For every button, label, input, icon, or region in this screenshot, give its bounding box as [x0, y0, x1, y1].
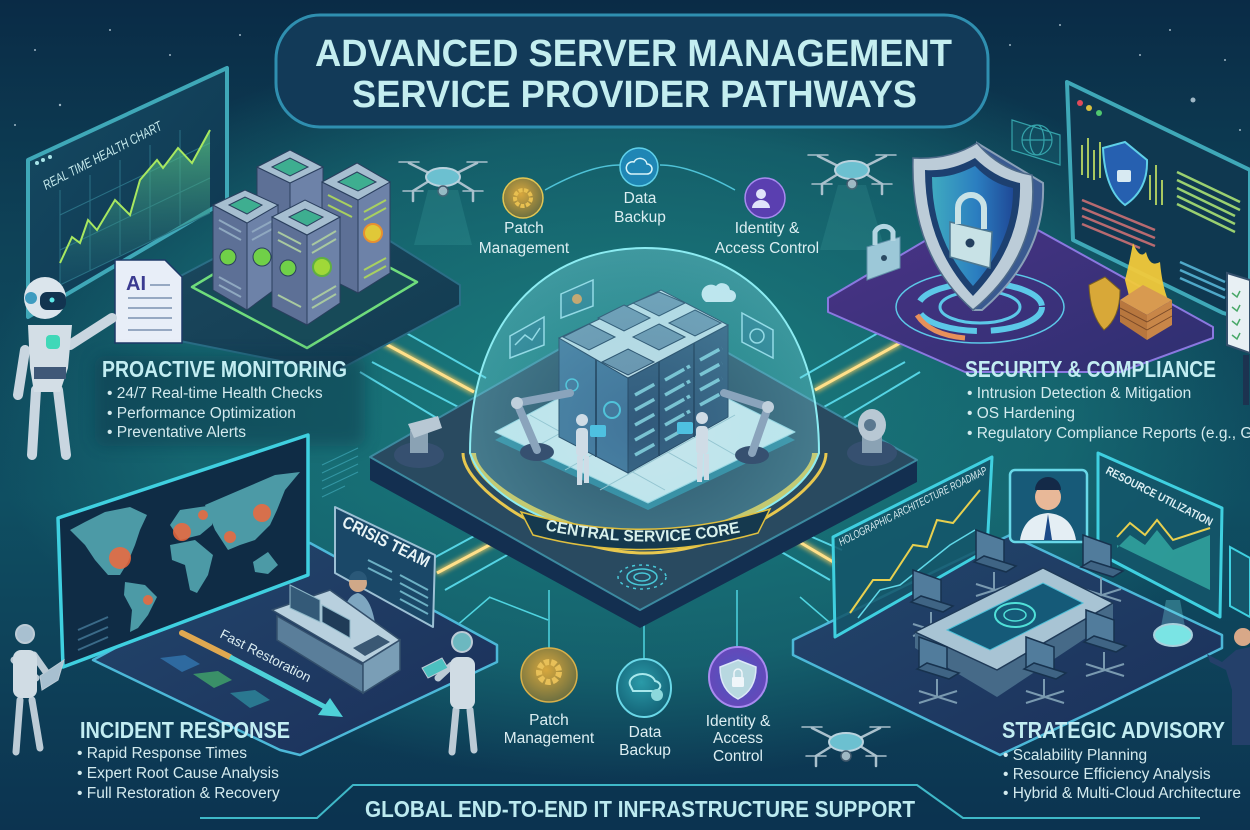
icon: drone: [399, 162, 487, 245]
expert tile: [1010, 470, 1087, 542]
label: patch management: Management: [479, 240, 570, 257]
bullets: • Hybrid & Multi-Cloud Architecture: [1003, 785, 1241, 802]
map text: [322, 448, 358, 497]
platform: [793, 535, 1222, 755]
icon: data backup: [617, 659, 671, 717]
bullets: • Performance Optimization: [107, 405, 296, 422]
bullets: • Full Restoration & Recovery: [77, 785, 280, 802]
label: data backup: Backup: [619, 742, 671, 759]
restoration arrow: Fast Restoration: [218, 626, 314, 685]
bullets: [77, 745, 280, 802]
panel: strategic advisory: [793, 453, 1250, 802]
label: patch management: Management: [504, 730, 595, 747]
robot left: [13, 625, 64, 752]
heading: INCIDENT RESPONSE: [80, 717, 290, 743]
tiled floor: [495, 355, 795, 510]
platform: [93, 543, 497, 755]
footer banner: GLOBAL END-TO-END IT INFRASTRUCTURE SUPPORT: [365, 796, 915, 822]
subtitle text: SERVICE PROVIDER PATHWAYS: [352, 74, 917, 116]
floating panels: [510, 280, 773, 358]
footer banner: [200, 785, 1200, 830]
bullets: • Expert Root Cause Analysis: [77, 765, 279, 782]
platform: [828, 203, 1213, 372]
chart screen: [28, 68, 227, 317]
bullets: • OS Hardening: [967, 405, 1075, 422]
icon: identity: [745, 178, 785, 218]
dome: [470, 248, 819, 540]
utilization screen: [1098, 453, 1222, 617]
label: identity: Identity &: [706, 713, 771, 730]
label: patch management: Patch: [529, 712, 569, 729]
title text: ADVANCED SERVER MANAGEMENT: [315, 33, 952, 75]
restoration arrow: [160, 626, 343, 717]
robot right: [422, 632, 475, 752]
roadmap screen: HOLOGRAPHIC ARCHITECTURE ROADMAP: [837, 465, 990, 549]
panel: proactive monitoring: [18, 68, 487, 455]
bullets: [1003, 747, 1241, 802]
label: identity: Control: [713, 748, 763, 765]
technician right: [677, 412, 709, 482]
connector lines: [360, 165, 920, 660]
core label: CENTRAL SERVICE CORE: [546, 520, 740, 542]
chart screen: REAL TIME HEALTH CHART: [40, 118, 166, 193]
heading: PROACTIVE MONITORING: [102, 356, 347, 382]
side panel: [1230, 547, 1250, 617]
checklist: [1227, 273, 1250, 405]
heading backdrop: [95, 356, 365, 446]
robot arm right: [724, 393, 774, 464]
bullets: • Rapid Response Times: [77, 745, 247, 762]
golden ring: [463, 453, 826, 553]
panel: incident response: [13, 435, 497, 802]
chairs: [911, 530, 1123, 636]
label: data backup: Data: [624, 190, 657, 207]
icon: globe hologram: [1012, 120, 1060, 165]
bullets: [967, 385, 1250, 442]
hologram pad: [1154, 600, 1192, 646]
table: [915, 568, 1113, 697]
rings: [896, 271, 1064, 343]
person and desk: [272, 571, 400, 693]
bullets: • Preventative Alerts: [107, 424, 246, 441]
label: identity: Access: [713, 730, 763, 747]
bottom service icons: [504, 647, 771, 765]
icon: core target: [618, 565, 666, 589]
title banner: [276, 15, 988, 127]
icon: drone bottom: [802, 727, 890, 766]
bullets: [107, 385, 323, 441]
icon: data backup: [620, 148, 658, 186]
technician left: [576, 414, 606, 485]
right screen: [1067, 82, 1250, 320]
bullets: • 24/7 Real-time Health Checks: [107, 385, 323, 402]
roadmap screen: [833, 457, 992, 637]
icon: firewall: [1089, 243, 1172, 340]
panel: security and compliance: [808, 82, 1250, 442]
bullets: • Scalability Planning: [1003, 747, 1147, 764]
robot: [18, 277, 112, 455]
robot arm left: [511, 393, 570, 461]
label: patch management: Patch: [504, 220, 544, 237]
label: identity: Access Control: [715, 240, 819, 257]
front chairs: [917, 610, 1126, 703]
green zone: [192, 221, 417, 348]
label: identity: Identity &: [735, 220, 800, 237]
icon: shield: [913, 143, 1043, 310]
crisis team screen: [335, 507, 435, 627]
bullets: • Intrusion Detection & Mitigation: [967, 385, 1191, 402]
top service icons: [479, 148, 819, 257]
icon: identity: [709, 647, 767, 707]
camera right: [847, 409, 897, 466]
platform: [150, 200, 460, 372]
label: data backup: Backup: [614, 209, 666, 226]
base platform: [370, 457, 917, 628]
icon: padlock: [867, 226, 900, 280]
person: [1207, 628, 1250, 745]
icon: patch management: [503, 178, 543, 218]
utilization screen: RESOURCE UTILIZATION: [1104, 465, 1214, 529]
central racks: [559, 290, 728, 473]
icon: drone: [808, 155, 896, 250]
core label: [520, 508, 772, 550]
AI document: [115, 260, 182, 343]
world map screen: [58, 435, 308, 667]
camera left: [394, 416, 444, 468]
icon: patch management: [521, 648, 577, 702]
label: data backup: Data: [629, 724, 662, 741]
central core: [369, 247, 918, 628]
bullets: • Resource Efficiency Analysis: [1003, 766, 1211, 783]
crisis team screen: CRISIS TEAM: [339, 513, 433, 571]
server racks: [213, 150, 390, 325]
AI document: AI: [126, 273, 146, 295]
